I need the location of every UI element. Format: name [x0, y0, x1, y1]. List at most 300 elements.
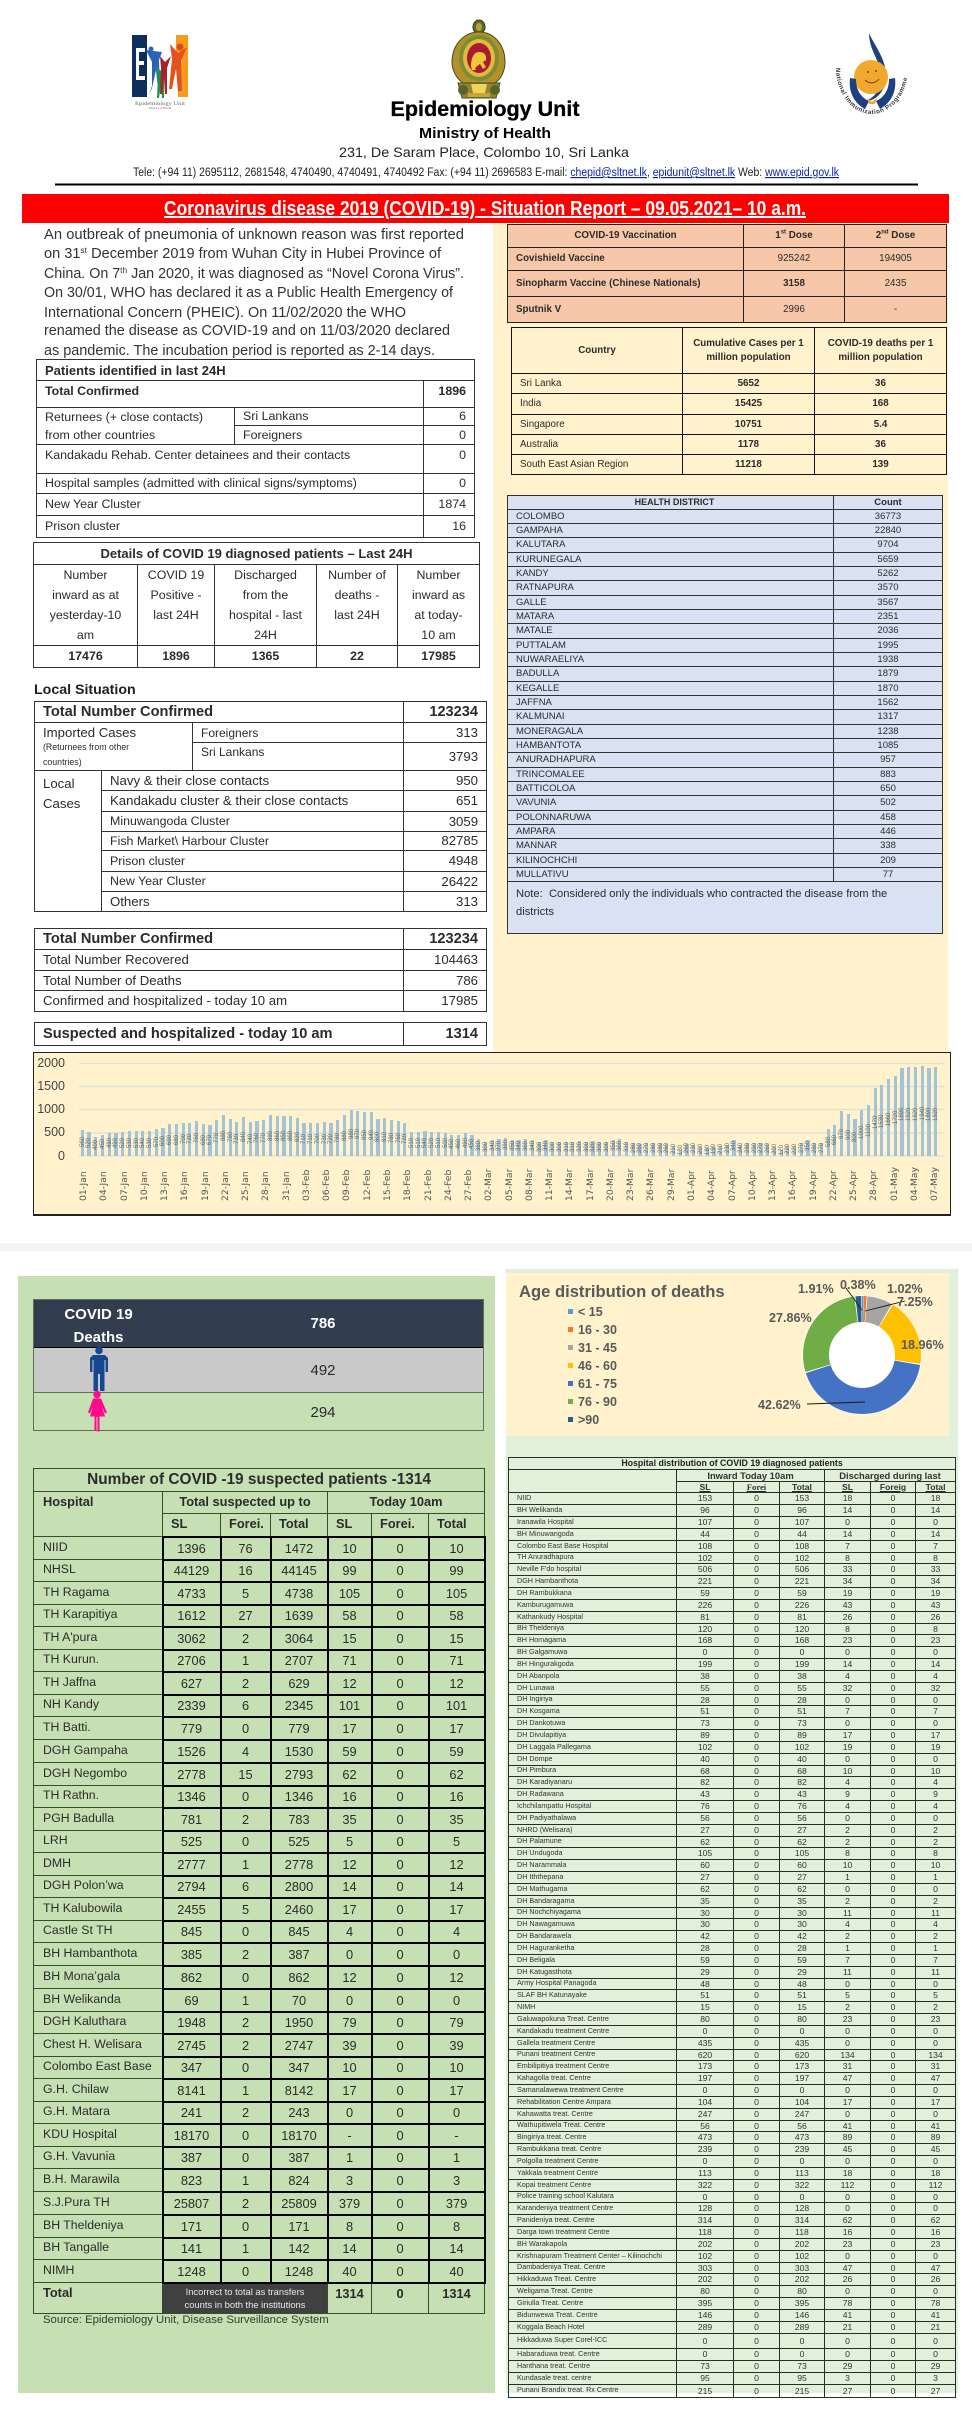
table: hospital distribution of diagnosed patients: Hospital distribution of COVID 19 diagnosed patients	[621, 1458, 843, 1468]
table: suspected patients by hospital: 1530	[285, 1744, 313, 1759]
table: hospital distribution of diagnosed patients: BH Theldeniya	[517, 1624, 564, 1632]
male deaths row: 492	[310, 1362, 336, 1379]
table: suspected patients by hospital: Hospital	[43, 1494, 93, 1509]
x axis date labels: 25-Jan	[240, 1171, 251, 1201]
table: local situation counts: New Year Cluster	[110, 874, 206, 888]
columns with data labels: 260	[684, 1143, 690, 1153]
table: cases by health district: 2351	[877, 611, 899, 622]
columns with data labels: 270	[799, 1143, 805, 1153]
columns with data labels: 390	[503, 1140, 509, 1150]
table: hospital distribution of diagnosed patients: 0	[754, 1848, 759, 1858]
table: hospital distribution of diagnosed patients: 0	[891, 2286, 895, 2296]
columns with data labels: 230	[725, 1143, 731, 1153]
columns with data labels: 270	[644, 1143, 650, 1153]
table: suspected patients by hospital: 58	[449, 1608, 464, 1623]
table: details of COVID 19 diagnosed patients: 17985	[421, 649, 456, 663]
table: hospital distribution of diagnosed patients: 0	[754, 2014, 759, 2024]
table: suspected patients by hospital: 779	[181, 1721, 202, 1736]
table: hospital distribution of diagnosed patients: 153	[795, 1493, 809, 1503]
columns with data labels: 280	[745, 1143, 751, 1153]
table: suspected patients by hospital: 59	[449, 1744, 464, 1759]
table: hospital distribution of diagnosed patients: 56	[797, 2121, 807, 2131]
table: cases by health district: 3567	[877, 597, 899, 608]
table: hospital distribution of diagnosed patients: 0	[891, 2251, 895, 2261]
table: hospital distribution of diagnosed patients: 18	[843, 1493, 852, 1503]
table: hospital distribution of diagnosed patients: DH Haguranketha	[517, 1943, 575, 1952]
table: hospital distribution of diagnosed patients: 33	[843, 1564, 852, 1574]
table: hospital distribution of diagnosed patients: 118	[795, 2227, 809, 2237]
table: COVID-19 vaccination: COVID-19 Vaccination	[574, 230, 677, 241]
table: hospital distribution of diagnosed patients: 0	[933, 2109, 938, 2119]
table: hospital distribution of diagnosed patients: 215	[698, 2386, 712, 2396]
table: suspected patients by hospital: 40	[342, 2264, 357, 2279]
table: hospital distribution of diagnosed patients: 0	[754, 1493, 759, 1503]
table: hospital distribution of diagnosed patients: 0	[703, 2336, 707, 2346]
table: hospital distribution of diagnosed patients: 44	[700, 1529, 710, 1539]
table: hospital distribution of diagnosed patients: 102	[698, 1553, 712, 1563]
table: hospital distribution of diagnosed patients: 108	[795, 1541, 809, 1551]
table: hospital distribution of diagnosed patients: 473	[698, 2132, 712, 2142]
table: hospital distribution of diagnosed patients: 59	[700, 1588, 710, 1598]
table: hospital distribution of diagnosed patients: 0	[933, 2156, 938, 2166]
table: hospital distribution of diagnosed patients: 41	[931, 2310, 940, 2320]
table: suspected patients by hospital: 2745	[177, 2038, 206, 2053]
table: suspected patients by hospital: 1639	[285, 1608, 313, 1623]
table: suspected patients by hospital: 25809	[281, 2196, 317, 2211]
table: hospital distribution of diagnosed patients: DH Pimbura	[517, 1766, 556, 1774]
table: suspected patients by hospital: BH Hambanthota	[43, 1946, 137, 1960]
table: hospital distribution of diagnosed patients: 0	[933, 1754, 938, 1764]
table: hospital distribution of diagnosed patients: 146	[795, 2310, 809, 2320]
table: hospital distribution of diagnosed patients: DH Radawana	[517, 1789, 564, 1798]
table: hospital distribution of diagnosed patients: 78	[931, 2298, 940, 2308]
text block: outbreak introduction: An outbreak of pneumonia of unknown reason was first reported	[44, 227, 464, 243]
table: cases by health district: BATTICOLOA	[516, 783, 575, 794]
columns with data labels: 530	[127, 1137, 133, 1148]
table: hospital distribution of diagnosed patients: 0	[891, 1635, 895, 1645]
table: hospital distribution of diagnosed patients: 0	[891, 1884, 895, 1894]
table: hospital distribution of diagnosed patients: 0	[754, 1860, 759, 1870]
table: hospital distribution of diagnosed patients: 0	[754, 1919, 759, 1929]
table: hospital distribution of diagnosed patients: 0	[891, 2310, 895, 2320]
table: hospital distribution of diagnosed patients: 0	[891, 1801, 895, 1811]
table: hospital distribution of diagnosed patients: 128	[698, 2203, 712, 2213]
table: suspected patients by hospital: 8	[346, 2219, 353, 2234]
table: hospital distribution of diagnosed patients: Kahagolla treat. Centre	[517, 2073, 591, 2082]
table: cases and deaths per million by country: 36	[875, 378, 886, 389]
table: hospital distribution of diagnosed patients: 0	[891, 2336, 895, 2346]
table: suspected patients by hospital: 1248	[177, 2264, 206, 2279]
columns with data labels: 300	[483, 1142, 489, 1152]
table: hospital distribution of diagnosed patients: 0	[891, 1695, 895, 1705]
table: hospital distribution of diagnosed patients: 0	[703, 2026, 707, 2036]
ministry letterhead text	[55, 98, 918, 186]
columns with data labels: 300	[557, 1142, 563, 1152]
table: suspected patients by hospital: 0	[396, 2286, 404, 2300]
table: hospital distribution of diagnosed patients: 0	[754, 1825, 759, 1835]
table: details of COVID 19 diagnosed patients: 1896	[162, 649, 190, 663]
text block: outbreak introduction: On 30/01, WHO has declared it as a Public Health Emergency of	[44, 285, 454, 301]
table: details of COVID 19 diagnosed patients: 22	[350, 649, 364, 663]
table: hospital distribution of diagnosed patients: 153	[698, 1493, 712, 1503]
table: hospital distribution of diagnosed patients: 56	[797, 1813, 807, 1823]
table: hospital distribution of diagnosed patients: 0	[754, 2073, 759, 2083]
table: suspected and hospitalized: 1314	[446, 1026, 478, 1042]
table: hospital distribution of diagnosed patients: 197	[795, 2073, 809, 2083]
table: cases and deaths per million by country: South East Asian Region	[520, 459, 628, 470]
table: local situation counts: Total Number Confirmed	[43, 704, 213, 720]
columns with data labels: 460	[456, 1139, 462, 1149]
table: hospital distribution of diagnosed patients: 14	[931, 1505, 940, 1515]
table: hospital distribution of diagnosed patients: Colombo East Base Hospital	[517, 1541, 608, 1550]
columns with data labels: 320	[590, 1142, 596, 1152]
table: hospital distribution of diagnosed patients: 0	[754, 1706, 759, 1716]
table: hospital distribution of diagnosed patients: 0	[933, 2085, 938, 2095]
table: cases and deaths per million by country: Sri Lanka	[520, 378, 561, 389]
table: hospital distribution of diagnosed patients: 0	[754, 2373, 759, 2383]
table: cases and deaths per million by country: 5.4	[874, 419, 887, 430]
table: hospital distribution of diagnosed patients: 0	[754, 1659, 759, 1669]
table: hospital distribution of diagnosed patients: 33	[931, 1564, 940, 1574]
columns with data labels: 970	[355, 1129, 361, 1139]
table: hospital distribution of diagnosed patients: BH Minuwangoda	[517, 1529, 574, 1538]
table: hospital distribution of diagnosed patients: 0	[891, 2038, 895, 2048]
table: hospital distribution of diagnosed patients: 0	[891, 2002, 895, 2012]
x axis date labels: 03-Feb	[301, 1170, 312, 1201]
columns with data labels: 450	[469, 1139, 475, 1149]
table: hospital distribution of diagnosed patients: 0	[754, 2274, 759, 2284]
table: hospital distribution of diagnosed patients: 0	[754, 1955, 759, 1965]
table: suspected patients by hospital: 3062	[177, 1631, 206, 1646]
table: suspected patients by hospital: 70	[292, 1993, 306, 2008]
table: hospital distribution of diagnosed patients: 0	[891, 1919, 895, 1929]
table: COVID-19 vaccination	[507, 224, 947, 323]
table: suspected patients by hospital: 8142	[285, 2083, 313, 2098]
chart legend	[568, 1305, 617, 1427]
table: hospital distribution of diagnosed patients: 62	[843, 2215, 852, 2225]
table: suspected patients by hospital: 17	[449, 2083, 464, 2098]
table: local situation counts: 950	[456, 773, 478, 788]
table: hospital distribution of diagnosed patients: 17	[931, 2097, 940, 2107]
table: hospital distribution of diagnosed patients: 0	[891, 1754, 895, 1764]
columns with data labels: 760	[396, 1133, 402, 1143]
donut chart: 27.86%	[769, 1311, 812, 1325]
table: hospital distribution of diagnosed patients: 215	[795, 2386, 809, 2396]
table: hospital distribution of diagnosed patients: 56	[700, 1813, 710, 1823]
table: suspected patients by hospital: KDU Hospital	[43, 2127, 117, 2141]
columns with data labels: 940	[369, 1130, 375, 1140]
table: suspected patients by hospital: 16	[342, 1789, 357, 1804]
table: hospital distribution of diagnosed patients: 395	[795, 2298, 809, 2308]
table: suspected patients by hospital: BH Welikanda	[43, 1992, 121, 2006]
table: details of COVID 19 diagnosed patients: from the	[243, 588, 288, 602]
table: suspected patients by hospital: 1	[453, 2150, 460, 2165]
table: hospital distribution of diagnosed patients: 0	[754, 2180, 759, 2190]
table: hospital distribution of diagnosed patients: SLAF BH Katunayake	[517, 1990, 587, 1999]
table: suspected patients by hospital: 385	[181, 1947, 202, 1962]
table: hospital distribution of diagnosed patients: 56	[700, 2121, 710, 2131]
table: cases by health district: 1562	[877, 697, 899, 708]
x axis date labels: 09-Feb	[341, 1170, 352, 1201]
table: cases by health district: 1870	[877, 683, 899, 694]
table: suspected patients by hospital: 79	[342, 2015, 357, 2030]
table: hospital distribution of diagnosed patients: 0	[754, 1541, 759, 1551]
table: cases by health district: Note: Considered only the individuals who contracted the disease from the	[516, 888, 887, 900]
table: suspected patients by hospital: 0	[242, 1721, 249, 1736]
logo: Epidemiology Unit	[132, 35, 188, 110]
table: cases by health district: 1995	[877, 640, 899, 651]
columns with data labels: 230	[691, 1143, 697, 1153]
table: suspected patients by hospital: 4	[242, 1744, 249, 1759]
table: hospital distribution of diagnosed patients: 0	[933, 2192, 938, 2202]
table: totals summary: Total Number Recovered	[43, 952, 189, 967]
table: suspected patients by hospital: 12	[342, 1970, 357, 1985]
table: suspected patients by hospital: 2706	[177, 1653, 206, 1668]
table: hospital distribution of diagnosed patients: 226	[795, 1600, 809, 1610]
table: suspected patients by hospital: 0	[346, 1993, 353, 2008]
table: suspected patients by hospital: 35	[342, 1812, 357, 1827]
table: cases by health district: KANDY	[516, 568, 549, 579]
table: hospital distribution of diagnosed patients: Kundasale treat. centre	[517, 2373, 591, 2382]
table: hospital distribution of diagnosed patients: 0	[754, 1695, 759, 1705]
columns with data labels: 880	[342, 1131, 348, 1141]
table: suspected patients by hospital: 40	[449, 2264, 464, 2279]
deaths header row: COVID 19	[64, 1306, 133, 1323]
x axis date labels: 24-Feb	[443, 1170, 454, 1201]
x axis date labels: 11-Mar	[544, 1169, 555, 1201]
table: hospital distribution of diagnosed patients: 168	[795, 1635, 809, 1645]
table: hospital distribution of diagnosed patients: 0	[891, 2215, 895, 2225]
table: cases by health district: PUTTALAM	[516, 640, 566, 651]
table: hospital distribution of diagnosed patients: 0	[754, 2215, 759, 2225]
columns with data labels: 1920	[913, 1107, 919, 1121]
table: suspected patients by hospital: 0	[396, 1857, 404, 1872]
table: suspected patients by hospital: 0	[396, 2219, 404, 2234]
table: cases and deaths per million by country: 15425	[735, 398, 762, 409]
table: hospital distribution of diagnosed patients: 0	[891, 1671, 895, 1681]
table: hospital distribution of diagnosed patients: 0	[891, 1493, 895, 1503]
text block: outbreak introduction: as pandemic. The incubation period is reported as 2-14 days.	[44, 343, 435, 359]
table: local situation counts: 26422	[441, 874, 478, 889]
table: hospital distribution of diagnosed patients: 134	[928, 2050, 943, 2060]
table: cases and deaths per million by country: million population	[838, 352, 923, 362]
table: hospital distribution of diagnosed patients: Samanalawewa treatment Centre	[517, 2085, 624, 2094]
table: hospital distribution of diagnosed patients: 4	[845, 1919, 850, 1929]
columns with data labels: 980	[349, 1129, 355, 1139]
table: hospital distribution of diagnosed patients: TH Anuradhapura	[517, 1552, 574, 1561]
table: suspected and hospitalized: Suspected and hospitalized - today 10 am	[43, 1026, 333, 1042]
table: hospital distribution of diagnosed patients: 2	[845, 1896, 850, 1906]
table: hospital distribution of diagnosed patients: 0	[754, 2386, 759, 2396]
table: hospital distribution of diagnosed patients: 0	[754, 2026, 759, 2036]
table: patients identified in last 24H: Patients identified in last 24H	[45, 362, 226, 378]
table: hospital distribution of diagnosed patients: Bidunwewa Treat. Centre	[517, 2310, 598, 2319]
table: details of COVID 19 diagnosed patients: Details of COVID 19 diagnosed patients – Last 24H	[100, 546, 413, 561]
x axis date labels: 08-Mar	[524, 1169, 535, 1201]
table: totals summary: Total Number of Deaths	[43, 973, 182, 988]
table: suspected patients by hospital: S.J.Pura TH	[43, 2195, 110, 2209]
table: totals summary: Confirmed and hospitalized - today 10 am	[43, 993, 287, 1008]
page break band	[0, 1243, 972, 1251]
table: suspected patients by hospital: 0	[396, 2150, 404, 2165]
columns with data labels: 310	[624, 1142, 630, 1152]
table: cases by health district: 1938	[877, 654, 899, 665]
table: hospital distribution of diagnosed patients: Kandakadu treatment Centre	[517, 2026, 609, 2035]
table: suspected patients by hospital: counts in both the institutions	[185, 2299, 305, 2310]
table: hospital distribution of diagnosed patients: 0	[891, 2014, 895, 2024]
columns with data labels: 360	[523, 1141, 529, 1151]
chart legend: 76 - 90	[578, 1395, 617, 1409]
table: hospital distribution of diagnosed patients: 0	[891, 2361, 895, 2371]
table: hospital distribution of diagnosed patients: 41	[931, 2121, 940, 2131]
x axis date labels: 12-Feb	[362, 1170, 373, 1201]
table: suspected patients by hospital: 0	[396, 1631, 404, 1646]
columns with data labels: 280	[658, 1143, 664, 1153]
columns with data labels: 880	[221, 1131, 227, 1141]
table: hospital distribution of diagnosed patients: 0	[754, 2061, 759, 2071]
table: hospital distribution of diagnosed patients: 0	[891, 2263, 895, 2273]
table: cases by health district: 209	[880, 855, 896, 866]
table: COVID 19 deaths by sex	[33, 1299, 484, 1431]
table: suspected patients by hospital: 5	[346, 1834, 353, 1849]
table: suspected patients by hospital: 17	[449, 1902, 464, 1917]
table: hospital distribution of diagnosed patients: 395	[698, 2298, 712, 2308]
table: hospital distribution of diagnosed patients: 8	[845, 1624, 850, 1634]
table: local situation counts: 313	[456, 725, 478, 740]
columns with data labels: 1920	[906, 1107, 912, 1121]
columns with data labels: 240	[738, 1143, 744, 1153]
table: hospital distribution of diagnosed patients: 8	[933, 1848, 938, 1858]
table: suspected patients by hospital: 0	[396, 2128, 404, 2143]
table: hospital distribution of diagnosed patients: 0	[891, 1683, 895, 1693]
table: suspected patients by hospital: 783	[288, 1812, 310, 1827]
table: hospital distribution of diagnosed patients: 0	[845, 2286, 850, 2296]
table: hospital distribution of diagnosed patients: NIMH	[517, 2002, 535, 2011]
table: hospital distribution of diagnosed patients: 173	[795, 2061, 809, 2071]
donut chart: 0.38%	[840, 1278, 876, 1292]
table: suspected patients by hospital: -	[347, 2128, 352, 2143]
table: totals summary: 17985	[441, 993, 478, 1008]
table: hospital distribution of diagnosed patients: 0	[891, 1896, 895, 1906]
table: hospital distribution of diagnosed patients: 0	[891, 2085, 895, 2095]
table: suspected patients by hospital: DGH Gampaha	[43, 1743, 128, 1757]
table: suspected patients by hospital: 1314	[442, 2286, 471, 2300]
columns with data labels: 510	[436, 1138, 442, 1148]
table: hospital distribution of diagnosed patients: 314	[698, 2215, 712, 2225]
ministry letterhead text: Ministry of Health	[419, 125, 551, 142]
table: cases and deaths per million by country: Country	[578, 345, 616, 356]
columns with data labels: 300	[584, 1142, 590, 1152]
table: suspected patients by hospital: TH Kurun.	[43, 1652, 99, 1666]
table: hospital distribution of diagnosed patients: 0	[754, 1754, 759, 1764]
columns with data labels: 130	[678, 1145, 684, 1155]
table: hospital distribution of diagnosed patients: DH Palamune	[517, 1836, 562, 1845]
table: hospital distribution of diagnosed patients: 59	[797, 1588, 807, 1598]
donut chart: 7.25%	[897, 1295, 933, 1309]
table: hospital distribution of diagnosed patients: 19	[931, 1588, 940, 1598]
table: hospital distribution of diagnosed patients: 0	[703, 2192, 707, 2202]
columns with data labels: 690	[167, 1135, 173, 1145]
table: hospital distribution of diagnosed patients: 4	[933, 1919, 938, 1929]
columns with data labels: 360	[476, 1141, 482, 1151]
table: hospital distribution of diagnosed patients: 0	[891, 2373, 895, 2383]
y axis labels	[37, 1056, 65, 1163]
columns with data labels: 800	[852, 1132, 858, 1142]
table: hospital distribution of diagnosed patients: 0	[891, 1706, 895, 1716]
table: hospital distribution of diagnosed patients: 51	[797, 1706, 807, 1716]
table: hospital distribution of diagnosed patients: Total	[926, 1482, 945, 1492]
table: hospital distribution of diagnosed patients: 239	[795, 2144, 809, 2154]
table: hospital distribution of diagnosed patients: 73	[797, 2361, 807, 2371]
table: suspected patients by hospital: SL	[171, 1516, 187, 1531]
table: hospital distribution of diagnosed patients: 202	[795, 2274, 809, 2284]
table: hospital distribution of diagnosed patients: 0	[891, 2156, 895, 2166]
table: hospital distribution of diagnosed patients: 10	[843, 1860, 852, 1870]
table: hospital distribution of diagnosed patients: 113	[698, 2168, 712, 2178]
x axis date labels: 05-Mar	[504, 1169, 515, 1201]
table: suspected patients by hospital: 0	[396, 1721, 404, 1736]
table: cases by health district: RATNAPURA	[516, 582, 574, 593]
table: hospital distribution of diagnosed patients: 173	[698, 2061, 712, 2071]
table: local situation counts: countries)	[43, 757, 82, 767]
table: suspected patients by hospital: 0	[346, 2105, 353, 2120]
columns with data labels: 570	[154, 1137, 160, 1147]
table: suspected patients by hospital: 0	[396, 1970, 404, 1985]
table: patients identified in last 24H: 6	[459, 409, 466, 423]
table: local situation counts: 82785	[441, 833, 478, 848]
table: details of COVID 19 diagnosed patients: am	[77, 628, 94, 642]
table: hospital distribution of diagnosed patients: 29	[700, 1967, 710, 1977]
table: suspected patients by hospital: 3064	[285, 1631, 313, 1646]
table: suspected patients by hospital: 0	[396, 2105, 404, 2120]
table: hospital distribution of diagnosed patients: 40	[797, 1754, 807, 1764]
table: hospital distribution of diagnosed patients: 4	[933, 1671, 938, 1681]
table: hospital distribution of diagnosed patients: 134	[840, 2050, 855, 2060]
table: hospital distribution of diagnosed patients: 0	[754, 2144, 759, 2154]
table: suspected patients by hospital: 62	[449, 1767, 464, 1782]
table: suspected patients by hospital: Forei.	[229, 1516, 264, 1531]
table: hospital distribution of diagnosed patients: 2	[845, 2002, 850, 2012]
table: cases and deaths per million by country: 139	[872, 459, 889, 470]
icon: woman	[88, 1390, 107, 1432]
table: hospital distribution of diagnosed patients: 0	[845, 1647, 850, 1657]
table: hospital distribution of diagnosed patients: 0	[845, 1517, 850, 1527]
table: hospital distribution of diagnosed patients: 0	[754, 1943, 759, 1953]
table: suspected patients by hospital: 1526	[177, 1744, 206, 1759]
table: hospital distribution of diagnosed patients: 0	[891, 1967, 895, 1977]
table: suspected patients by hospital: NHSL	[43, 1562, 76, 1576]
table: hospital distribution of diagnosed patients: 34	[843, 1576, 852, 1586]
table: hospital distribution of diagnosed patients: 0	[754, 2002, 759, 2012]
table: suspected patients by hospital: 14	[342, 1879, 357, 1894]
table: hospital distribution of diagnosed patients: BH Homagama	[517, 1635, 566, 1644]
columns with data labels: 1940	[920, 1107, 926, 1120]
table: cases by health district: MULLATIVU	[516, 869, 569, 880]
x axis date labels: 10-Apr	[747, 1170, 758, 1201]
columns with data labels: 890	[268, 1131, 274, 1141]
table: cases by health district: KURUNEGALA	[516, 554, 581, 565]
table: cases and deaths per million by country: 10751	[735, 419, 762, 430]
table: hospital distribution of diagnosed patients: 31	[931, 2061, 940, 2071]
table: suspected patients by hospital: 8141	[177, 2083, 206, 2098]
table: hospital distribution of diagnosed patients: 0	[845, 1718, 850, 1728]
table: details of COVID 19 diagnosed patients: at today-	[414, 608, 463, 622]
table: hospital distribution of diagnosed patients: 0	[845, 2038, 850, 2048]
table: hospital distribution of diagnosed patients: 4	[845, 1671, 850, 1681]
table: hospital distribution of diagnosed patients: 80	[700, 2014, 710, 2024]
columns with data labels: 1920	[933, 1107, 939, 1121]
table: hospital distribution of diagnosed patients: 0	[754, 2203, 759, 2213]
